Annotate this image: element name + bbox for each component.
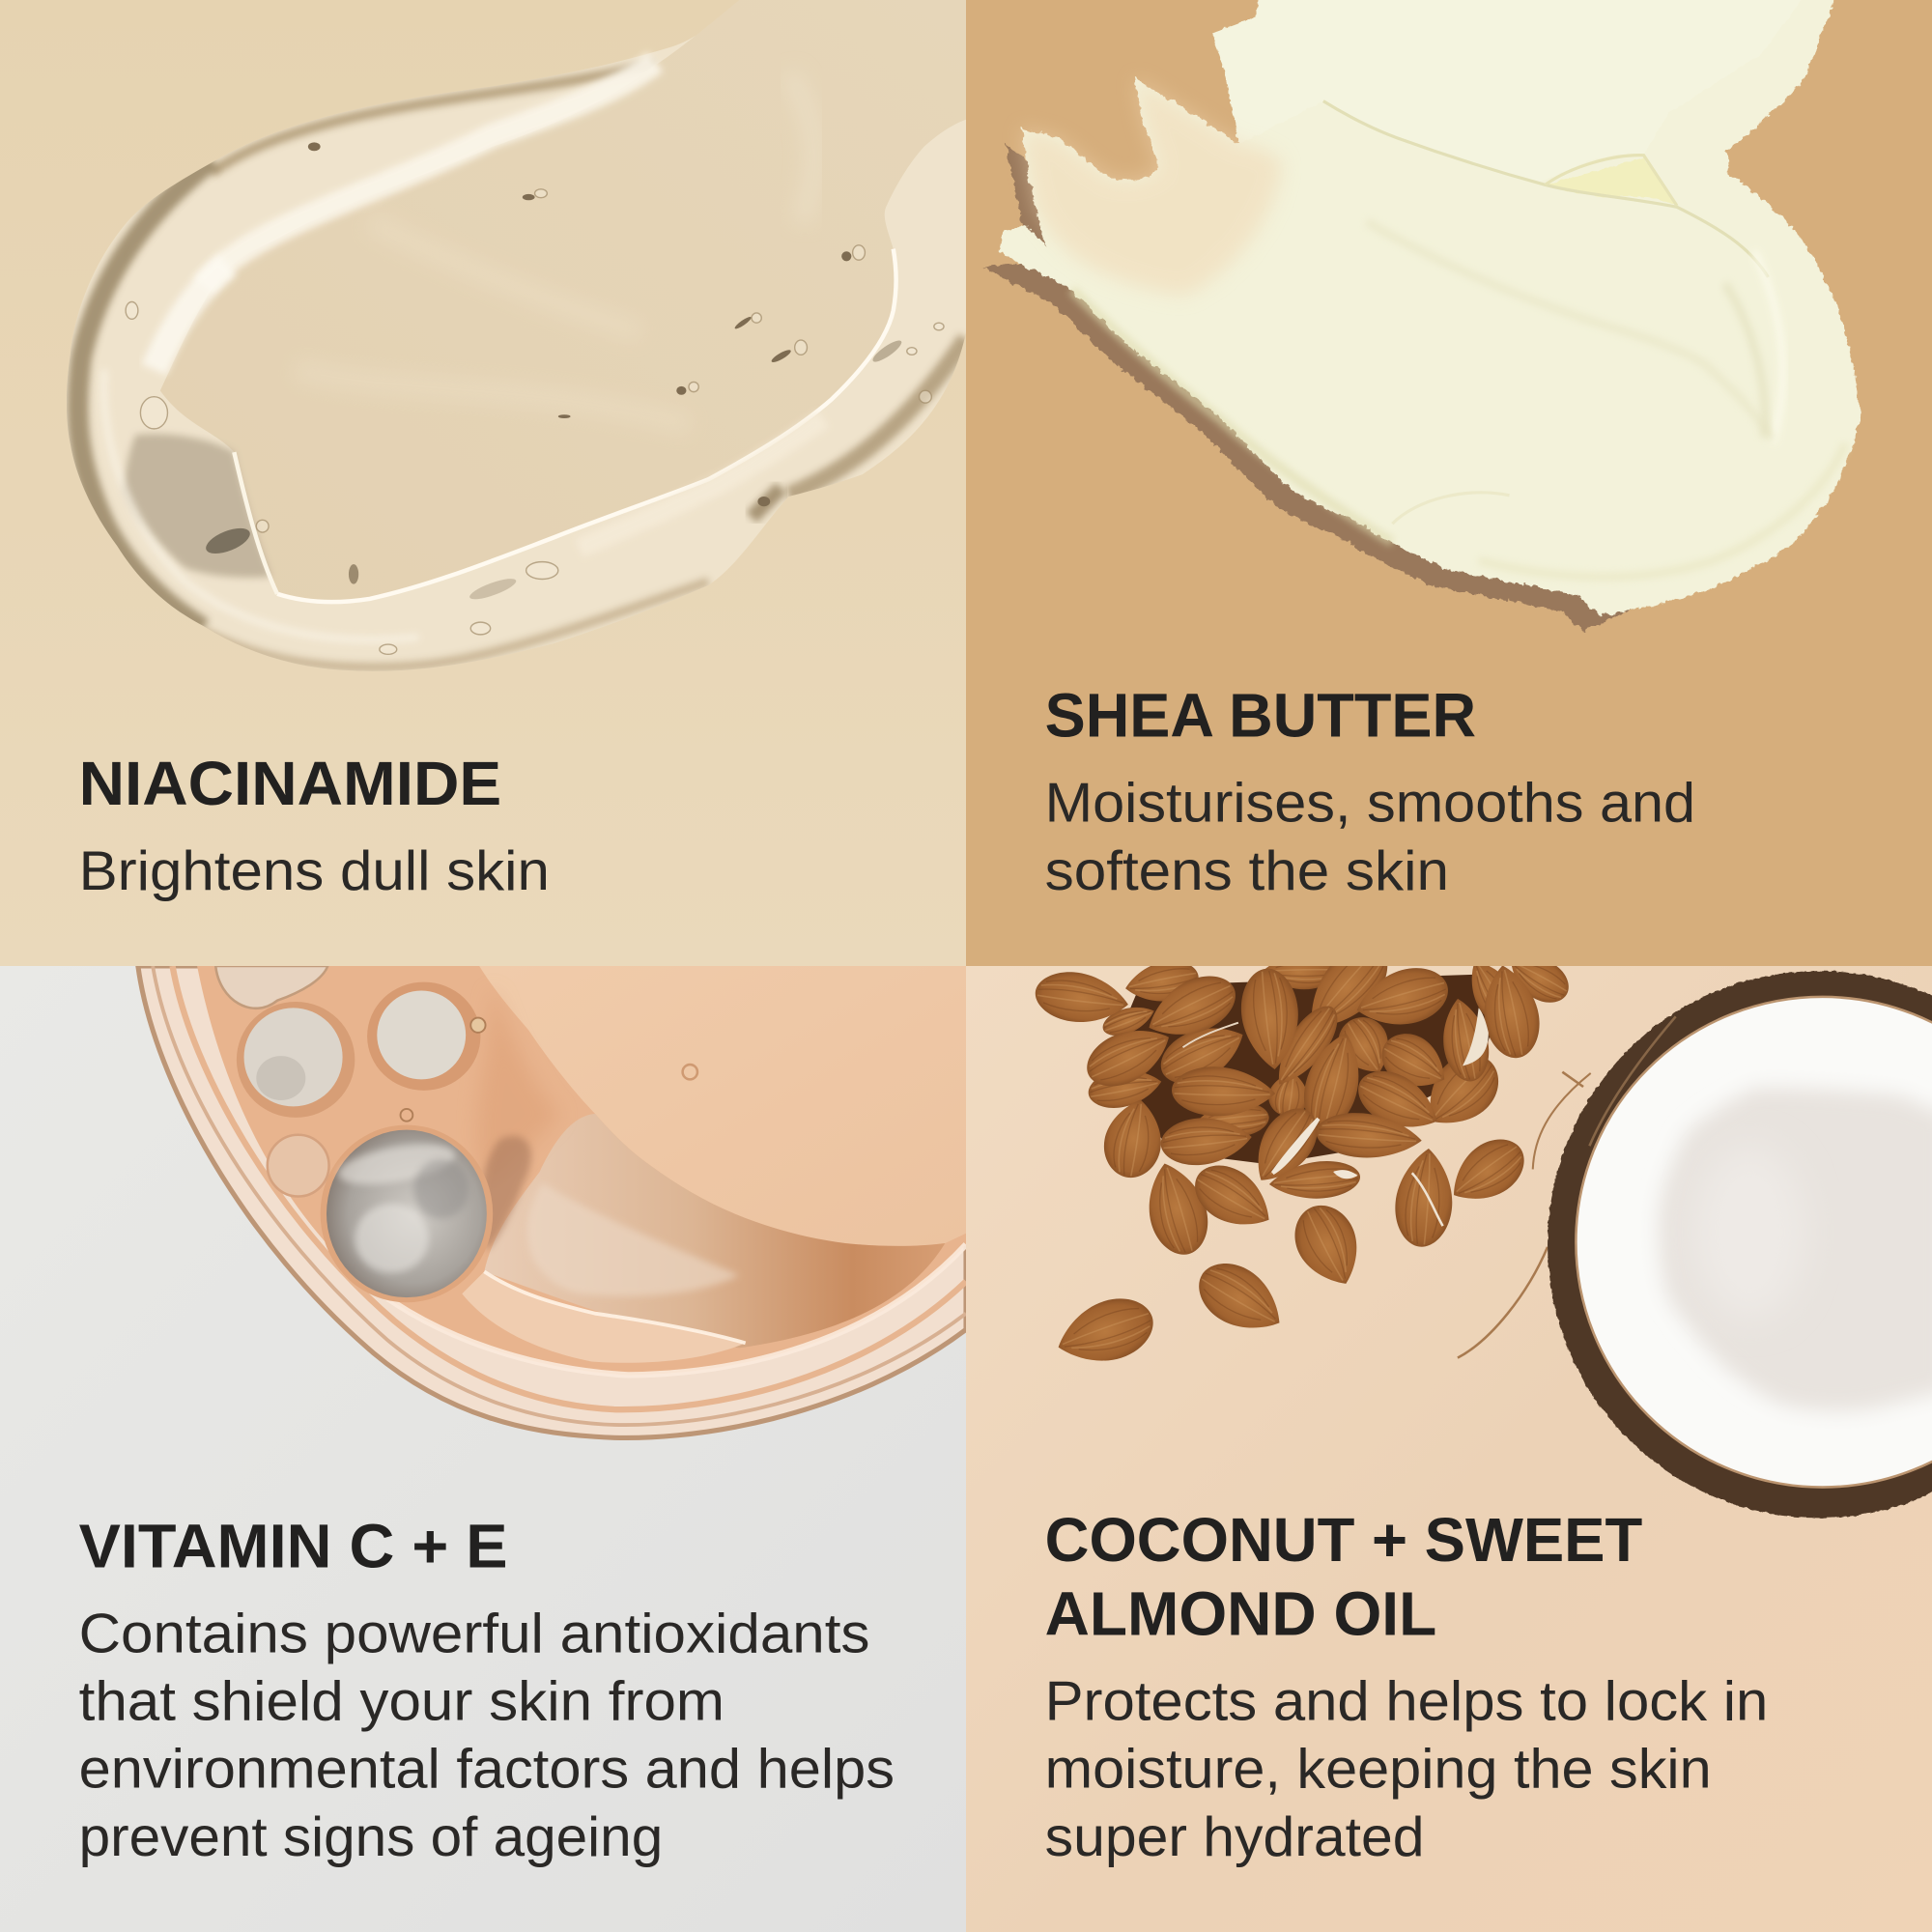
heading: shea butter: SHEA BUTTER [1045,681,1476,751]
almond pile [1036,966,1569,1361]
text: shea butter benefit [1046,781,1692,891]
text: vitamin c + e benefit [79,1603,895,1868]
heading: vitamin c + e: VITAMIN C + E [79,1511,508,1580]
text: coconut + sweet almond oil benefit [1045,1671,1768,1868]
text: coconut + sweet almond oil benefit: Protects and helps to lock in [1045,1671,1768,1733]
text: coconut + sweet almond oil benefit: moisture, keeping the skin [1045,1739,1712,1801]
heading: coconut + sweet almond oil [1045,1505,1642,1649]
text: vitamin c + e benefit: environmental factors and helps [79,1739,895,1801]
gel bubbles and specks [203,142,904,603]
text: shea butter benefit: softens the skin [1045,840,1449,902]
heading: niacinamide: NIACINAMIDE [79,749,501,818]
coconut [1458,971,1932,1518]
text: vitamin c + e benefit: that shield your skin from [79,1671,724,1733]
panel: coconut + sweet almond oil [966,931,1932,1932]
panel: shea butter [966,0,1932,966]
text: vitamin c + e benefit: prevent signs of ageing [79,1806,663,1868]
oil bubbles [215,966,697,1302]
butter swatch [983,0,1860,632]
heading: coconut + sweet almond oil: COCONUT + SWEET [1045,1505,1642,1575]
coconut fibres [1458,1072,1591,1358]
panel: niacinamide [0,0,966,966]
oil dish [138,966,966,1437]
text: vitamin c + e benefit: Contains powerful antioxidants [79,1603,870,1664]
heading: coconut + sweet almond oil: ALMOND OIL [1045,1579,1436,1649]
oil body [197,966,966,1375]
text: niacinamide benefit: Brightens dull skin [79,840,550,902]
gel swatch [67,0,966,671]
panel: vitamin c + e [0,966,966,1932]
text: shea butter benefit: Moisturises, smooths and [1045,773,1695,835]
text: coconut + sweet almond oil benefit: super hydrated [1045,1806,1424,1868]
